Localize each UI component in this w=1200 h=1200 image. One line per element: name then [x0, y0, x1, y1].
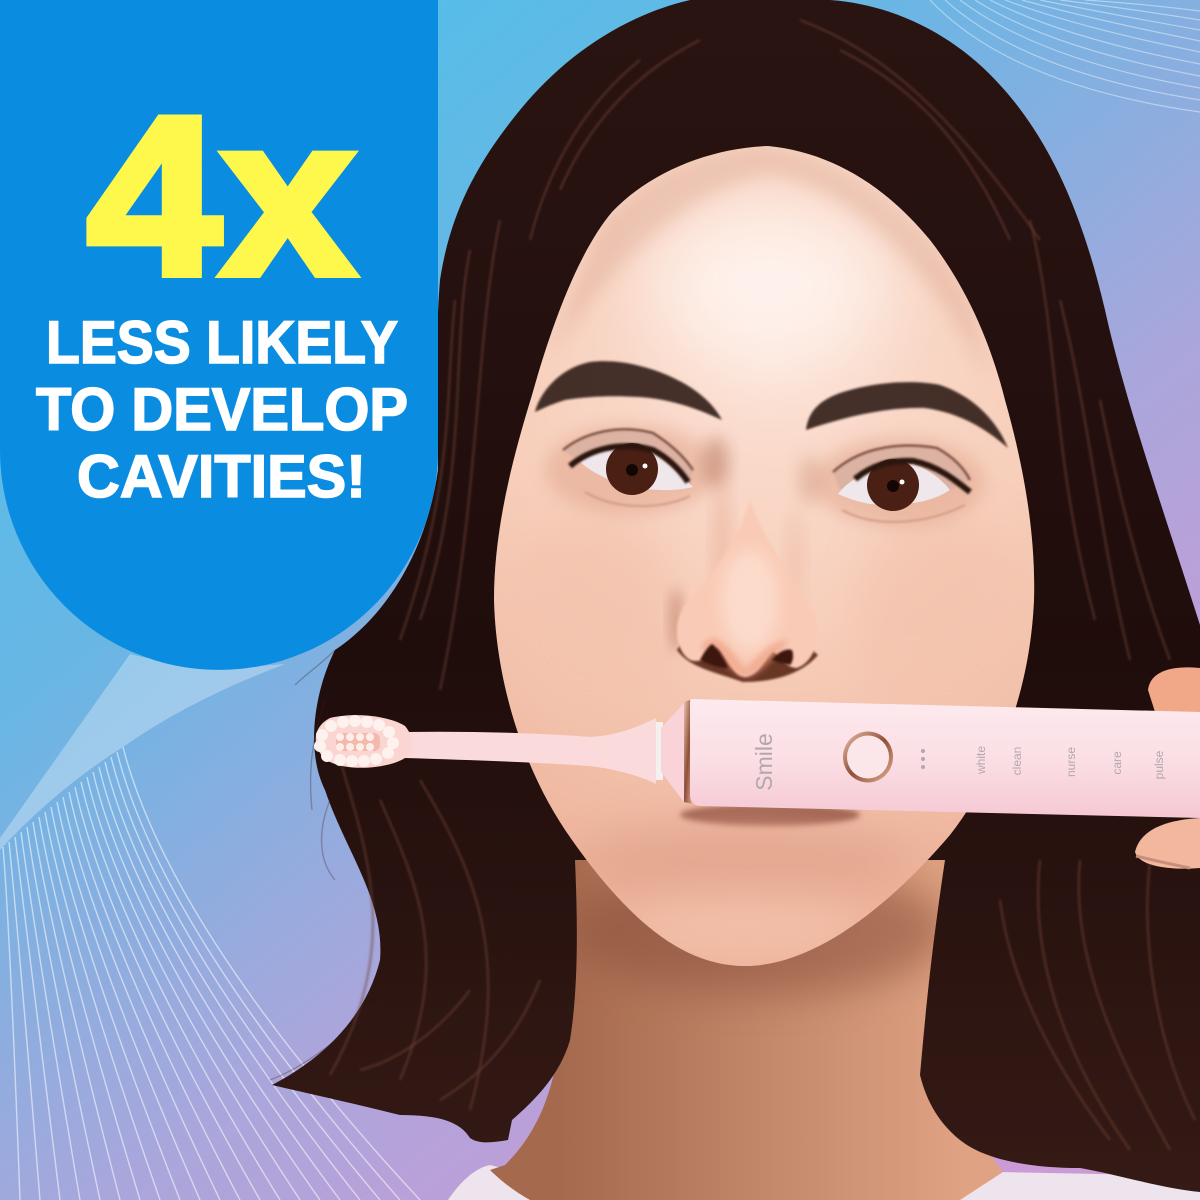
inner eye shadows [703, 437, 729, 489]
handle brand and mode labels [751, 733, 1166, 791]
fingers beside handle [1135, 667, 1200, 869]
headline text [36, 309, 408, 510]
under-lip shadow [680, 804, 860, 826]
handle brand and mode labels: clean [1010, 747, 1024, 775]
brush collar [656, 699, 693, 804]
headline text: LESS LIKELY [46, 309, 398, 376]
neck [490, 850, 1003, 1200]
brush neck [405, 718, 656, 784]
cheek tone [494, 521, 665, 684]
face [494, 146, 1035, 966]
right eye [833, 445, 970, 522]
handle brand and mode labels: Smile [751, 733, 777, 791]
woman portrait [270, 0, 1200, 1200]
hair [270, 0, 1200, 1192]
brush head [314, 715, 412, 768]
headline text: TO DEVELOP [36, 376, 408, 443]
handle brand and mode labels: pulse [1152, 750, 1166, 779]
shirt [448, 1165, 1200, 1200]
nose [669, 485, 818, 682]
hairline shadow [562, 146, 982, 352]
power button [843, 732, 893, 782]
brush handle [690, 699, 1200, 818]
left eye [563, 429, 693, 506]
big stat: 4x: 4x [87, 69, 355, 322]
handle brand and mode labels: nurse [1064, 747, 1078, 777]
forehead highlight [650, 200, 890, 370]
handle brand and mode labels: white [974, 746, 988, 775]
hair highlights [330, 20, 1195, 1150]
toothbrush [314, 667, 1200, 869]
decorative line waves: bottom left [0, 654, 420, 1200]
indicator dots [921, 749, 925, 769]
chin shadow on neck [570, 865, 950, 995]
decorative line waves: top right [930, 0, 1200, 112]
hair wisps [270, 650, 380, 1080]
right eyebrow [806, 382, 1008, 448]
eye socket tone [545, 425, 715, 515]
panel: headline [0, 0, 438, 670]
handle brand and mode labels: care [1110, 751, 1124, 775]
panel background [0, 0, 438, 670]
left eyebrow [535, 361, 722, 420]
headline text: CAVITIES! [77, 443, 366, 510]
